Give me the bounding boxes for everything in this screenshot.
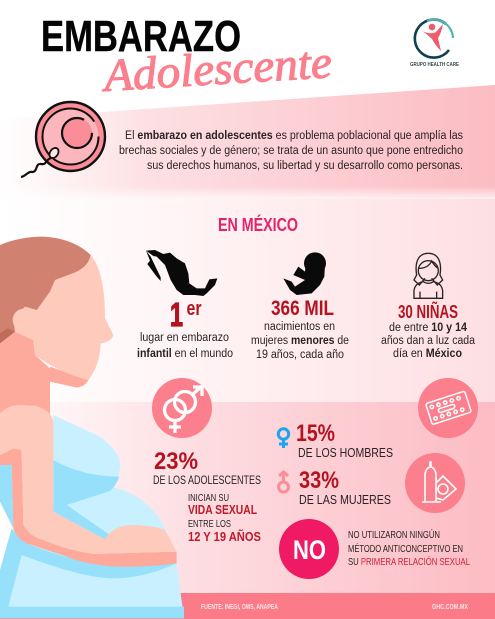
title: Embarazo: EMBARAZO	[41, 12, 241, 61]
stat: 33% women: 33%	[299, 467, 339, 494]
icon: condom	[405, 453, 465, 513]
stat: 366 mil: nacimientos en	[264, 321, 335, 333]
intro paragraph: El embarazo en adolescentes es problema poblacional que amplía las	[125, 130, 463, 142]
head	[0, 237, 113, 425]
stat: 15% men	[296, 420, 393, 460]
stat: 30 niñas: 30 NIÑAS	[398, 301, 458, 322]
stat: 23% of adolescents: 12 Y 19 AÑOS	[188, 529, 261, 544]
illustration: pregnant woman	[0, 237, 184, 618]
stat: 30 niñas: de entre 10 y 14	[389, 322, 468, 334]
stat: first place: lugar en embarazo	[140, 332, 229, 344]
text: no contraceptive method: NO UTILIZARON NINGÚN	[348, 528, 440, 541]
band: Mexico section background	[0, 199, 495, 402]
stat: 366 mil: 19 años, cada año	[256, 349, 344, 361]
stat: first place: 1	[170, 296, 183, 333]
text: no contraceptive method	[348, 528, 470, 568]
logo: Grupo Health Care	[410, 20, 459, 68]
footer bar: FUENTE: INEGI, OMS, ANAPEA	[201, 604, 278, 611]
stat: 33% women: DE LAS MUJERES	[299, 492, 391, 507]
stat: 30 niñas: día en México	[393, 348, 462, 360]
stat: first place	[137, 296, 233, 360]
stat: 366 mil	[251, 297, 349, 361]
intro paragraph: brechas sociales y de género; se trata de un asunto que pone entredicho	[119, 145, 463, 157]
stat: 15% men: DE LOS HOMBRES	[298, 445, 393, 460]
stat: 30 niñas	[381, 301, 476, 360]
stat: 366 mil: mujeres menores de	[251, 335, 349, 347]
title: Adolescente: Adolescente	[99, 36, 333, 101]
stat: 23% of adolescents: DE LOS ADOLESCENTES	[153, 473, 261, 487]
stat: 33% women	[299, 467, 391, 507]
badge: No: NO	[293, 535, 326, 565]
stat: 23% of adolescents: INICIAN SU	[188, 493, 229, 504]
icon: fetus	[283, 252, 326, 295]
band: statistics section background	[0, 402, 495, 619]
icon: girl	[414, 253, 443, 298]
icon: egg and sperm	[21, 102, 105, 177]
stat: 15% men: 15%	[296, 420, 335, 447]
stat: 366 mil: 366 MIL	[271, 297, 334, 320]
icon: gender symbols	[152, 378, 212, 438]
body	[0, 405, 184, 618]
icon: map of Mexico	[146, 250, 217, 296]
icon: blue gender symbol	[278, 429, 289, 448]
icon: pink gender symbol	[278, 472, 288, 492]
stat: 30 niñas: años dan a luz cada	[381, 335, 476, 347]
stat: first place: er	[186, 298, 202, 320]
intro paragraph	[119, 130, 463, 172]
stat: 23% of adolescents	[153, 448, 261, 544]
stat: 23% of adolescents: VIDA SEXUAL	[188, 502, 257, 517]
footer bar	[0, 593, 495, 619]
intro paragraph: sus derechos humanos, su libertad y su desarrollo como personas.	[147, 160, 463, 172]
footer bar: GHC.COM.MX	[432, 604, 468, 611]
stat: 23% of adolescents: 23%	[154, 448, 198, 475]
badge: No	[279, 519, 339, 579]
logo: Grupo Health Care: GRUPO HEALTH CARE	[410, 62, 459, 68]
stat: 23% of adolescents: ENTRE LOS	[188, 519, 231, 530]
heading: En México: EN MÉXICO	[218, 214, 298, 235]
stat: first place: infantil en el mundo	[137, 348, 233, 360]
icon: contraceptive pills	[418, 378, 478, 438]
band: intro background	[0, 85, 495, 199]
